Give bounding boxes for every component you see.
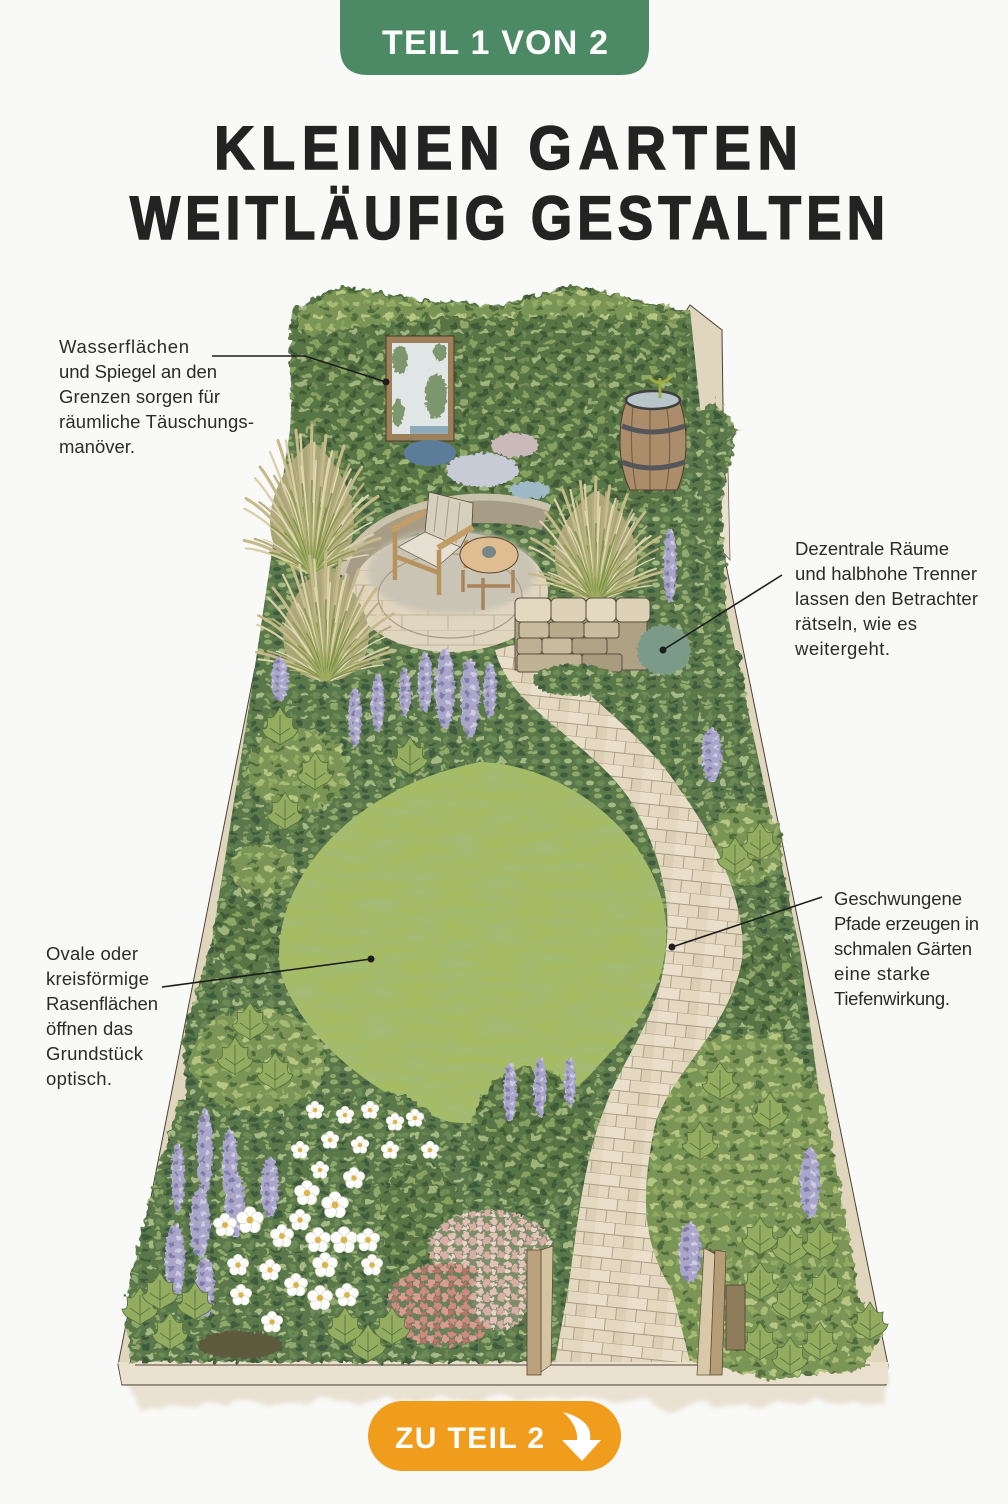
lawn bbox=[279, 762, 666, 1123]
teal shrub by wall bbox=[637, 625, 691, 675]
callout: water and mirrors: räumliche Täuschungs- bbox=[59, 411, 254, 432]
title: WEITLÄUFIG GESTALTEN bbox=[130, 184, 885, 253]
button: to part 2: ZU TEIL 2 bbox=[395, 1422, 544, 1455]
paving circle bbox=[352, 532, 548, 652]
stone wall bbox=[515, 598, 650, 672]
callout: curved paths: schmalen Gärten bbox=[834, 938, 972, 959]
garden illustration bbox=[118, 285, 888, 1408]
title: KLEINEN GARTEN bbox=[214, 115, 798, 183]
curved brick path bbox=[495, 640, 743, 1362]
lavender spikes bbox=[165, 528, 820, 1317]
back hedge bbox=[288, 285, 692, 520]
callout: curved paths: Tiefenwirkung. bbox=[834, 988, 950, 1009]
callout: oval lawns bbox=[46, 943, 374, 1089]
callout: curved paths: Pfade erzeugen in bbox=[834, 913, 979, 934]
entrance posts and gate bbox=[527, 1246, 745, 1375]
icon: curved arrow bbox=[562, 1412, 601, 1461]
bare soil patch bbox=[198, 1331, 282, 1359]
low plants below wall bbox=[533, 664, 617, 696]
right upper border planting bbox=[530, 650, 800, 1040]
bottom right bed bbox=[640, 1030, 885, 1380]
patio bbox=[342, 497, 550, 652]
lilac blossom under mirror bbox=[446, 433, 550, 499]
rain barrel bbox=[620, 376, 686, 490]
title bbox=[130, 115, 885, 253]
callout: curved paths: eine starke bbox=[834, 963, 930, 984]
ground under plants bbox=[135, 310, 855, 1360]
callout: oval lawns: Ovale oder bbox=[46, 943, 138, 964]
callout: water and mirrors bbox=[59, 336, 390, 457]
callout: oval lawns: Grundstück bbox=[46, 1043, 144, 1064]
watercolor wash under garden bbox=[122, 1375, 886, 1408]
left border planting bbox=[182, 660, 540, 1130]
callout: oval lawns: Rasenflächen bbox=[46, 993, 158, 1014]
callout: water and mirrors: Wasserflächen bbox=[59, 336, 189, 357]
right side climbers bbox=[670, 400, 738, 690]
callout: water and mirrors: und Spiegel an den bbox=[59, 361, 217, 382]
bottom left bed bbox=[125, 1060, 610, 1362]
hedge top fringe bbox=[296, 288, 680, 335]
callout: decentralized spaces: Dezentrale Räume bbox=[795, 538, 949, 559]
chair bbox=[392, 492, 473, 595]
button: to part 2 bbox=[368, 1401, 621, 1471]
white flowers bbox=[213, 1101, 439, 1332]
callout: water and mirrors: Grenzen sorgen für bbox=[59, 386, 220, 407]
callout: oval lawns: öffnen das bbox=[46, 1018, 133, 1039]
plants overlapping lawn foot bbox=[293, 1067, 588, 1203]
ornamental grasses bbox=[237, 425, 665, 688]
callout: water and mirrors: manöver. bbox=[59, 436, 135, 457]
callout: decentralized spaces: und halbhohe Trenner bbox=[795, 563, 977, 584]
curved seat wall bbox=[354, 510, 546, 590]
callout: decentralized spaces: rätseln, wie es bbox=[795, 613, 917, 634]
water surface bbox=[404, 440, 456, 466]
callout: oval lawns: kreisförmige bbox=[46, 968, 149, 989]
callout: curved paths: Geschwungene bbox=[834, 888, 962, 909]
tab: part 1 of 2 bbox=[340, 0, 649, 75]
mirror on fence bbox=[386, 336, 456, 466]
callout: decentralized spaces bbox=[660, 538, 978, 659]
callout: oval lawns: optisch. bbox=[46, 1068, 112, 1089]
garden boundary walls bbox=[118, 305, 888, 1385]
large leaf plants bbox=[122, 707, 888, 1375]
lighter shrubs bbox=[190, 728, 815, 1280]
callout: curved paths bbox=[668, 888, 979, 1009]
pink flower bed bbox=[387, 1210, 552, 1347]
callout: decentralized spaces: lassen den Betrachter bbox=[795, 588, 978, 609]
callout: decentralized spaces: weitergeht. bbox=[794, 638, 890, 659]
tab: part 1 of 2: TEIL 1 VON 2 bbox=[382, 24, 608, 62]
round table bbox=[460, 537, 518, 610]
